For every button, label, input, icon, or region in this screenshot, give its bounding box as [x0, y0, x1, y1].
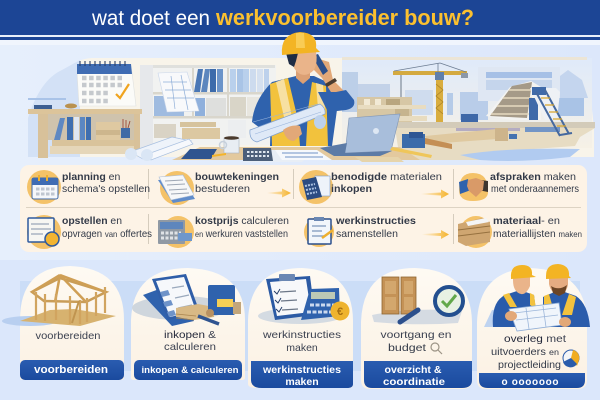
text: werkinstructies	[335, 215, 416, 240]
icon: clipboard, calculator and coin	[258, 274, 350, 324]
card: inkopen en calculeren	[131, 268, 245, 380]
blueprint rolls	[125, 137, 193, 161]
neck	[296, 68, 310, 84]
ground and earth	[395, 128, 595, 160]
text: materiaal	[493, 215, 582, 240]
text: bouwtekeningen	[195, 171, 279, 195]
right arm and sleeve	[318, 90, 354, 112]
safety vest	[270, 78, 328, 146]
text: planning: planning en	[62, 171, 121, 183]
hero illustration: office and construction site	[28, 32, 595, 162]
band label: werkinstructies	[262, 364, 341, 376]
coffee mug	[220, 136, 239, 153]
arrow	[267, 188, 291, 198]
laptop	[320, 114, 400, 156]
title: wat doet een	[91, 7, 210, 30]
text: materiaal: materiaal- en	[493, 215, 560, 227]
forearm and hand on phone	[312, 58, 347, 100]
icon: clipboard	[304, 217, 334, 247]
label text: uitvoerders en	[491, 346, 559, 358]
text: afspraken: afspraken maken	[490, 171, 576, 183]
arrow	[421, 190, 449, 198]
text: opstellen: opstellen en	[62, 215, 122, 227]
label text	[262, 329, 341, 354]
text: opstellen: opvragen van offertes	[62, 228, 152, 240]
phone	[312, 54, 328, 75]
label text: voortgang en	[380, 329, 452, 341]
icon: calculator and price list	[299, 170, 333, 204]
label text: projectleiding	[498, 359, 561, 371]
header banner	[0, 0, 600, 45]
hand on rolls	[283, 126, 302, 141]
desk calculator and plans	[242, 148, 332, 162]
band label	[383, 365, 445, 388]
title highlight: werkvoorbereider bouw?	[215, 5, 474, 30]
text: planning	[62, 171, 150, 195]
arrow	[422, 230, 449, 239]
text: benodigde materialen: inkopen	[331, 183, 372, 195]
band label: coordinatie	[383, 377, 445, 388]
site props: toolbox and beams	[402, 114, 517, 149]
left worker	[493, 290, 538, 327]
card: overleg	[477, 264, 590, 389]
band label: maken	[285, 376, 319, 388]
window with construction site	[342, 57, 592, 148]
text: kostprijs: kostprijs calculeren	[195, 215, 289, 227]
card: overzicht en coordinatie	[361, 268, 472, 389]
icon: material stack	[458, 216, 492, 248]
label text	[380, 329, 452, 354]
back wall	[60, 58, 594, 157]
coin symbol: €	[337, 306, 343, 318]
ruler and tape on desk	[390, 147, 432, 158]
label text	[164, 329, 216, 353]
text: afspraken	[490, 171, 579, 195]
label text	[491, 333, 566, 371]
pinned blueprint on shelf	[158, 72, 199, 112]
torso shirt	[270, 76, 340, 146]
illustration: two workers with plan	[484, 264, 590, 331]
face	[290, 52, 317, 75]
wall calendar with check mark	[77, 61, 136, 106]
icon: doors and magnifier	[372, 277, 463, 324]
building under construction	[357, 97, 427, 129]
concrete stair structure and ladder	[486, 81, 572, 136]
text: planning: schema's opstellen	[62, 183, 150, 195]
text: benodigde materialen	[331, 171, 442, 195]
card: voorbereiden	[2, 266, 124, 380]
label text: inkopen &	[164, 329, 216, 341]
bookcase with binders	[140, 65, 276, 150]
text: opstellen	[62, 215, 152, 240]
paper on desk	[355, 157, 404, 162]
label text: voorbereiden	[36, 330, 101, 342]
hard hat	[282, 32, 320, 55]
label text: maken	[286, 342, 318, 354]
text: kostprijs: en werkuren vaststellen	[195, 228, 288, 240]
icon: timber frame house	[2, 275, 116, 326]
label text: budget	[388, 342, 426, 354]
band label: inkopen & calculeren	[142, 365, 239, 376]
text: kostprijs	[195, 215, 289, 240]
wooden side desk	[28, 104, 142, 158]
wristwatch	[325, 78, 337, 87]
band label: overzicht &	[384, 365, 442, 376]
icon: drawings	[158, 171, 195, 205]
icon: handshake	[459, 173, 488, 201]
band label	[262, 364, 341, 388]
hair	[286, 53, 298, 67]
text: afspraken: met onderaannemers	[491, 183, 579, 195]
icon: pie chart	[563, 350, 579, 367]
plan	[509, 303, 562, 331]
text: bouwtekeningen: bestuderen	[195, 183, 250, 195]
band label: o ooooooo	[502, 377, 558, 388]
text: materiaal: materiallijsten maken	[493, 228, 582, 240]
label text: overleg met	[504, 333, 566, 345]
text: werkinstructies: samenstellen	[336, 228, 398, 240]
card: werkinstructies maken	[248, 268, 353, 388]
tower crane	[393, 63, 468, 127]
blueprint rolls in arm	[250, 104, 325, 142]
notebook and pen	[181, 149, 226, 159]
icon: quotation	[27, 215, 61, 249]
main desk	[172, 147, 420, 160]
engineer on the phone	[250, 32, 354, 146]
right worker	[543, 290, 590, 327]
icon: calculator	[158, 216, 194, 248]
icon: documents, timber and tools	[132, 274, 241, 326]
left arm	[252, 82, 284, 137]
label text: calculeren	[164, 341, 216, 353]
icon: calendar	[27, 170, 61, 204]
text: bouwtekeningen: bouwtekeningen	[195, 171, 279, 183]
panel: task list	[20, 165, 587, 252]
label text: werkinstructies	[262, 329, 341, 341]
band label: voorbereiden	[34, 364, 108, 376]
text: benodigde materialen: benodigde materialen	[331, 171, 442, 183]
text: werkinstructies: werkinstructies	[335, 215, 416, 227]
icon: small magnifier	[431, 343, 442, 354]
